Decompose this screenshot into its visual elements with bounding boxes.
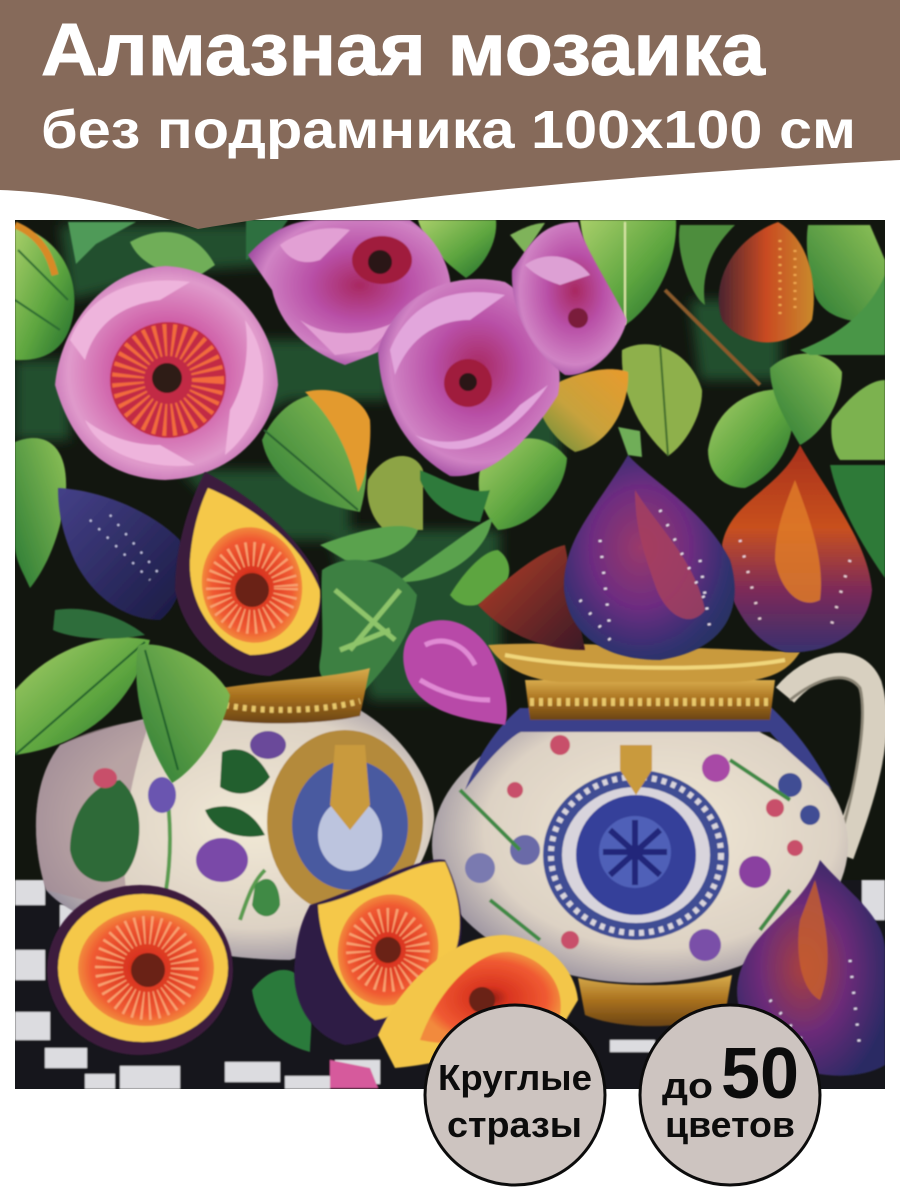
leaf: top left bbox=[15, 225, 74, 360]
badge: up to 50 colours bbox=[640, 1005, 820, 1185]
badge: round rhinestones bbox=[425, 1005, 605, 1185]
fig: right bbox=[722, 445, 872, 652]
leaf: lower left big bbox=[15, 609, 150, 755]
badge: up to 50 colours: до bbox=[662, 1065, 713, 1106]
branch bbox=[665, 290, 760, 385]
leaf: green center bbox=[479, 438, 567, 530]
checkered tablecloth bbox=[15, 880, 885, 1089]
jug handle bbox=[785, 665, 875, 855]
title line 1: Алмазная мозаика bbox=[41, 8, 766, 91]
jug neck bbox=[525, 680, 775, 720]
jug floral specks bbox=[460, 735, 820, 961]
leaf: lower left second bbox=[136, 644, 230, 783]
fig half: left upper bbox=[175, 472, 321, 676]
fig half: bottom right front bbox=[378, 935, 578, 1068]
fig: small red bbox=[478, 545, 585, 650]
vase neck gold band bbox=[222, 668, 370, 723]
left vase bbox=[36, 668, 434, 960]
fig: dark blue left bbox=[58, 488, 184, 620]
jug rim bbox=[488, 644, 800, 682]
jug medallion bbox=[543, 770, 729, 940]
fig half: bottom center bbox=[294, 860, 462, 1045]
rose: center bbox=[378, 279, 560, 476]
jug foot bbox=[578, 975, 732, 1026]
leaf: right cluster bbox=[708, 389, 793, 488]
jug body bbox=[432, 707, 848, 983]
badge: round rhinestones: Круглые bbox=[438, 1057, 592, 1098]
leaf: orange-green big bbox=[262, 393, 367, 512]
badge: round rhinestones: стразы bbox=[447, 1104, 582, 1145]
leaf: left middle bbox=[15, 438, 66, 588]
brown title banner bbox=[0, 0, 900, 229]
vase shaded left side bbox=[36, 720, 150, 910]
leaf: top right center bbox=[580, 220, 676, 326]
painting: figs, roses and porcelain jugs bbox=[15, 220, 885, 1089]
vase medallion bbox=[267, 730, 423, 914]
rose: large left bbox=[55, 266, 278, 480]
fig: top right bbox=[719, 222, 814, 342]
badge: up to 50 colours: цветов bbox=[665, 1104, 795, 1145]
background leaves bbox=[15, 220, 885, 690]
leaf: mid center right bbox=[622, 344, 702, 456]
rose: upper right small bbox=[512, 222, 627, 375]
badge: up to 50 colours: 50 bbox=[721, 1034, 799, 1114]
leaf: top center bbox=[418, 220, 496, 278]
fig: large center bbox=[564, 427, 735, 660]
leaf: cluster beside half fig bbox=[320, 518, 492, 582]
jug: right bbox=[432, 644, 875, 1026]
small pink flower bbox=[403, 620, 507, 725]
fig: lower right bbox=[737, 860, 885, 1076]
leaf: orange leaf behind rose bbox=[535, 369, 628, 452]
fig half: bottom left bbox=[47, 885, 233, 1055]
rose: top center bbox=[248, 220, 451, 365]
vase floral painting bbox=[70, 780, 139, 882]
title line 2: без подрамника 100х100 см bbox=[41, 100, 856, 160]
leaf: vase bottom bbox=[252, 970, 312, 1052]
leaf: top center-left group bbox=[130, 231, 216, 274]
dark foliage background bbox=[15, 225, 780, 700]
